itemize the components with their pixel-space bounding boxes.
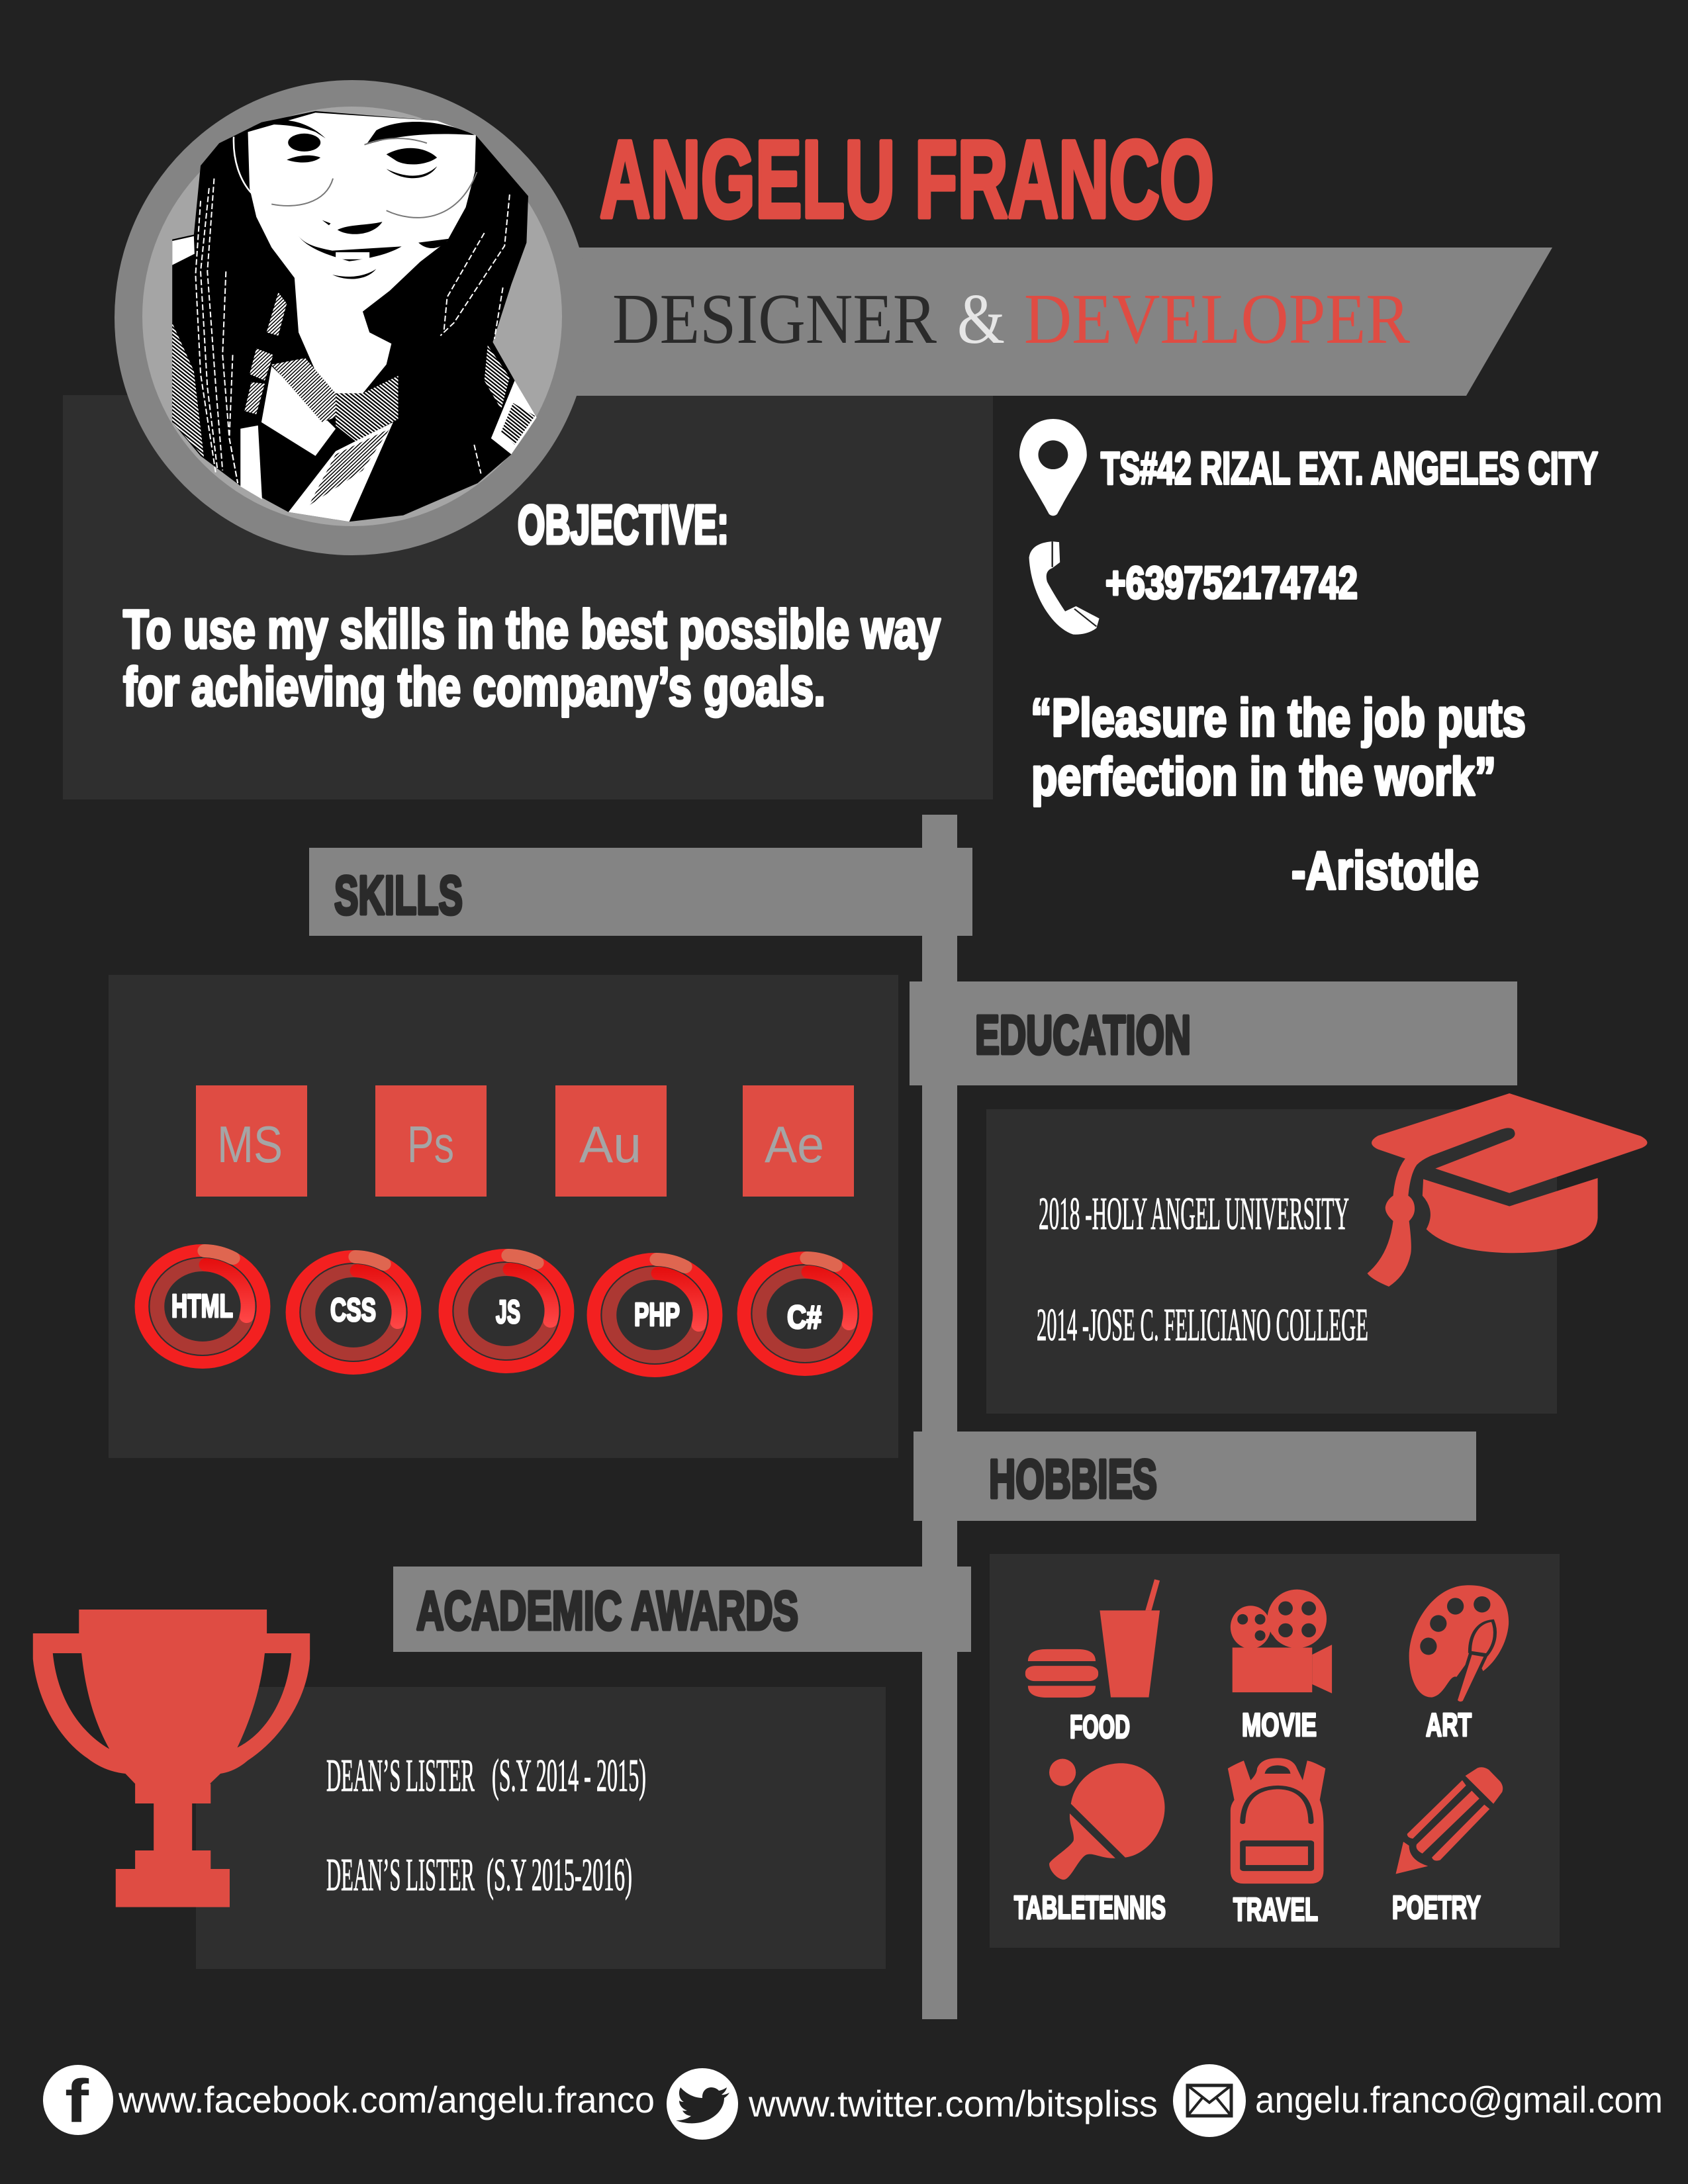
software skill tiles: MS [217, 1115, 283, 1173]
footer: email [1173, 2064, 1663, 2137]
icon: graduation cap [1368, 1093, 1647, 1287]
vertical signpost pole [922, 815, 957, 2019]
panel: skills [109, 975, 898, 1458]
quote [1031, 688, 1526, 901]
icon: location pin [1019, 419, 1087, 516]
icon: table tennis paddle [1049, 1759, 1165, 1880]
quote: “Pleasure in the job puts [1031, 688, 1526, 748]
panel: academic awards: (S.Y 2014 - 2015) [492, 1751, 646, 1801]
objective heading: OBJECTIVE: [518, 494, 729, 555]
education signpost [910, 981, 1517, 1085]
panel: academic awards [196, 1687, 886, 1969]
hobby labels: TABLETENNIS [1014, 1890, 1166, 1926]
hair at forehead, brows, eyes [261, 120, 475, 279]
panel: education [986, 1109, 1557, 1414]
icon: phone [1029, 541, 1100, 635]
objective text: To use my skills in the best possible way [123, 598, 941, 660]
skill ring: PHP: PHP [634, 1297, 680, 1333]
software skill tiles: Ae [765, 1115, 824, 1173]
footer: email: angelu.franco@gmail.com [1255, 2079, 1663, 2120]
skill ring: JS: JS [496, 1295, 520, 1330]
quote author: -Aristotle [1291, 841, 1479, 901]
icon: trophy [33, 1610, 310, 1907]
subtitle: designer and developer: & [957, 280, 1005, 359]
software skill tiles: Ps [407, 1115, 454, 1173]
panel: academic awards: (S.Y 2015-2016) [487, 1850, 632, 1901]
icon: movie camera [1231, 1590, 1332, 1694]
glasses [271, 138, 477, 218]
icon: pencil [1396, 1767, 1503, 1874]
skill ring: PHP [594, 1259, 716, 1371]
hobbies signpost [914, 1432, 1476, 1521]
panel: academic awards: DEAN’S LISTER [326, 1751, 475, 1801]
academic awards signpost: ACADEMIC AWARDS [416, 1580, 798, 1641]
footer: facebook: www.facebook.com/angelu.franco [118, 2079, 655, 2120]
skill ring: CSS: CSS [330, 1293, 376, 1328]
name heading: ANGELU FRANCO [600, 118, 1214, 241]
portrait photo [172, 111, 537, 522]
skill ring: HTML: HTML [171, 1289, 233, 1324]
objective text: for achieving the company’s goals. [123, 656, 825, 717]
skill ring: CSS [293, 1256, 414, 1369]
academic awards signpost [393, 1567, 971, 1652]
footer: twitter: www.twitter.com/bitspliss [748, 2083, 1158, 2124]
hobby labels: MOVIE [1242, 1707, 1317, 1743]
portrait frame [115, 80, 590, 555]
panel: academic awards: DEAN’S LISTER [326, 1850, 475, 1901]
title banner [576, 248, 1552, 396]
skill ring: C#: C# [787, 1300, 821, 1336]
software skill tiles [196, 1085, 854, 1197]
collar [261, 366, 336, 456]
hobby labels: POETRY [1392, 1890, 1481, 1926]
quote: perfection in the work” [1031, 747, 1496, 807]
hobby labels: FOOD [1070, 1709, 1130, 1745]
icon: art palette [1409, 1585, 1509, 1703]
skill ring: JS [445, 1255, 567, 1367]
panel: hobbies [990, 1554, 1560, 1948]
education signpost: EDUCATION [975, 1004, 1191, 1066]
footer: twitter [667, 2068, 1158, 2140]
hobby labels: ART [1426, 1707, 1472, 1743]
software skill tiles: Au [579, 1115, 641, 1173]
subtitle: designer and developer [612, 280, 1410, 359]
icon: backpack [1228, 1758, 1325, 1884]
hobbies signpost: HOBBIES [989, 1448, 1157, 1510]
skill ring: HTML [142, 1251, 263, 1362]
skills signpost [309, 848, 972, 936]
icon: food [1025, 1579, 1160, 1698]
skill ring: C# [744, 1257, 866, 1370]
footer: facebook [43, 2065, 655, 2135]
subtitle: designer and developer: DEVELOPER [1024, 280, 1410, 359]
hobby labels [1014, 1707, 1481, 1928]
skills signpost: SKILLS [334, 864, 463, 926]
subtitle: designer and developer: DESIGNER [612, 280, 937, 359]
footer: facebook: f [65, 2068, 89, 2135]
objective text [123, 598, 941, 717]
panel: objective [63, 395, 993, 799]
phone number: +639752174742 [1105, 557, 1358, 608]
hobby labels: TRAVEL [1233, 1892, 1318, 1928]
